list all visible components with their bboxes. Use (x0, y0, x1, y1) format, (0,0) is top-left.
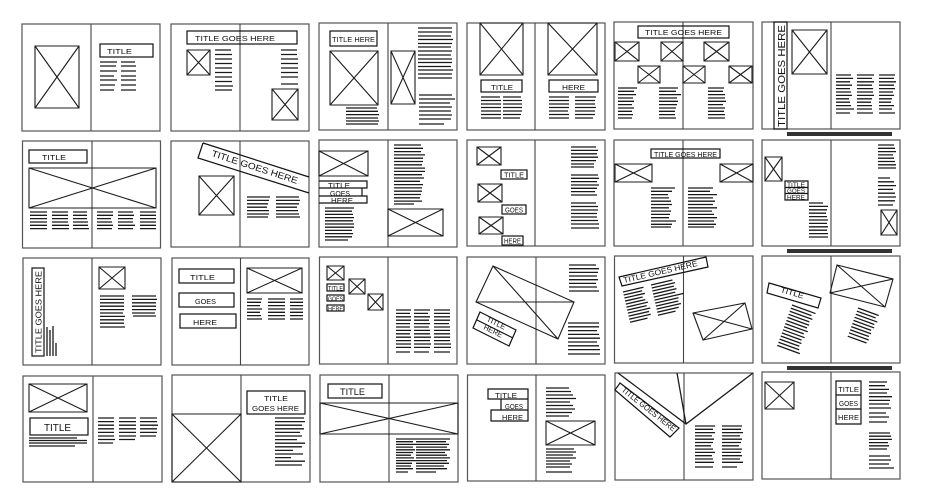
spread 20 (172, 375, 310, 482)
spread 14 (172, 258, 309, 365)
bar 3 (787, 366, 892, 370)
image placeholder (199, 176, 234, 215)
title: TITLE GOES HERE (645, 28, 722, 37)
title: TITLE (264, 394, 288, 403)
spread 16 (467, 257, 605, 364)
image placeholder (546, 421, 595, 445)
stacked title: TITLE (495, 391, 517, 400)
text column left (325, 208, 354, 240)
rotated title: TITLE GOES HERE (620, 385, 677, 433)
bar 1 (787, 132, 892, 136)
image placeholder (35, 46, 79, 108)
text block (546, 388, 576, 416)
stacked title: GOES (330, 191, 350, 198)
image placeholder (247, 268, 302, 293)
fold lines image placeholder (618, 373, 753, 424)
stacked title: TITLE (838, 385, 859, 394)
spread 18 (762, 256, 900, 363)
small title labels: HERE (328, 306, 344, 313)
title: TITLE (190, 273, 215, 282)
text columns (396, 439, 450, 472)
spread 17 (614, 256, 753, 363)
rotated title: HERE (482, 323, 504, 340)
text block bottom (568, 323, 600, 354)
vertical text lines (47, 326, 56, 356)
text blocks (571, 147, 599, 228)
text block top (569, 265, 599, 291)
spread 21 (320, 375, 458, 482)
text column centre (809, 203, 828, 237)
image placeholder right (548, 23, 597, 75)
rotated text column (848, 308, 880, 344)
image placeholders (327, 266, 383, 310)
title right: HERE (562, 83, 585, 92)
spread 5 (614, 22, 753, 129)
bar 2 (787, 249, 892, 253)
text column right (281, 50, 298, 84)
image placeholder (29, 384, 87, 412)
spread 10 (467, 140, 605, 246)
image placeholder (765, 382, 794, 409)
text block top (418, 28, 453, 78)
text columns (396, 310, 451, 352)
rotated title (473, 312, 516, 346)
image placeholders (615, 164, 753, 182)
stacked title: GOES (787, 188, 806, 195)
stacked title: HERE (787, 194, 806, 202)
text blocks right (878, 145, 896, 205)
text columns (100, 296, 157, 327)
text columns (247, 197, 300, 217)
intro text (29, 438, 87, 446)
vertical title: TITLE GOES HERE (34, 271, 44, 353)
stacked title: GOES (839, 399, 858, 408)
goes label: GOES (505, 206, 523, 214)
large image placeholder (172, 414, 241, 482)
spread 13 (23, 258, 161, 365)
image placeholder (881, 210, 897, 235)
goes label: GOES (195, 297, 216, 306)
text column left (215, 50, 233, 90)
text columns (618, 88, 726, 118)
spread 12 (762, 140, 900, 246)
title label: TITLE (504, 170, 524, 180)
title: TITLE GOES HERE (195, 34, 275, 43)
small title labels (327, 284, 344, 313)
image placeholder (272, 89, 298, 120)
image placeholder (99, 267, 125, 289)
title: TITLE (107, 47, 132, 56)
title: TITLE (42, 153, 66, 162)
stacked title: GOES (505, 402, 523, 411)
rotated text column (623, 287, 652, 322)
text columns (695, 426, 743, 467)
title: TITLE (340, 387, 365, 397)
spread 3 (319, 23, 457, 130)
spread 7 (22, 141, 160, 248)
slanted title: TITLE GOES HERE (210, 148, 299, 186)
stacked title: HERE (838, 413, 859, 422)
spread 11 (614, 140, 753, 246)
rotated title: TITLE GOES HERE (622, 259, 699, 285)
rotated title: TITLE (779, 285, 805, 301)
image placeholder (765, 157, 782, 181)
rotated image placeholder (693, 303, 752, 340)
text column (275, 418, 305, 465)
here label: HERE (193, 318, 217, 327)
text columns (836, 75, 896, 113)
spread 22 (468, 375, 605, 481)
stacked title (836, 381, 861, 424)
vertical title: TITLE GOES HERE (777, 25, 788, 127)
title: TITLE HERE (332, 35, 375, 44)
text columns (98, 418, 158, 443)
image placeholder (187, 50, 210, 75)
small title labels: GOES (328, 296, 344, 303)
spread 8 (171, 141, 309, 247)
stacked title (785, 181, 808, 202)
text columns (30, 212, 156, 229)
spread 9 (319, 140, 457, 247)
rotated text column (651, 278, 687, 315)
image placeholders (615, 42, 752, 83)
title: GOES HERE (252, 404, 299, 413)
text column right (394, 145, 425, 204)
spread 19 (23, 376, 162, 482)
image placeholder left (480, 23, 523, 75)
text columns (247, 299, 303, 319)
caption text (346, 108, 379, 124)
rotated image placeholder (476, 266, 574, 339)
rotated image placeholder (830, 265, 893, 307)
small title labels: TITLE (328, 286, 344, 292)
title: TITLE (44, 423, 71, 434)
text columns (481, 97, 596, 118)
spread 24 (762, 372, 900, 479)
text columns (651, 188, 717, 227)
spread 6 (762, 22, 900, 129)
text columns (100, 62, 136, 90)
stacked title: TITLE (787, 182, 806, 189)
text block bottom (419, 95, 455, 124)
rotated title: TITLE (485, 315, 507, 332)
text blocks (869, 382, 894, 468)
title: TITLE GOES HERE (654, 150, 717, 159)
here label: HERE (504, 236, 521, 246)
stacked title: HERE (331, 198, 353, 205)
spread 23 (615, 373, 753, 480)
image placeholder (391, 51, 415, 104)
spread 15 (320, 257, 457, 364)
stacked title (488, 389, 528, 422)
spread 2 (171, 24, 309, 131)
image placeholder top (319, 151, 368, 176)
image placeholder (330, 51, 378, 105)
spread 1 (22, 24, 160, 131)
wide image placeholder (320, 403, 458, 434)
title (247, 391, 305, 414)
title left: TITLE (491, 83, 513, 92)
stacked title (319, 181, 367, 205)
spread 4 (467, 23, 605, 130)
image placeholder (792, 30, 827, 74)
image placeholder bottom (388, 209, 443, 236)
wide image placeholder (29, 168, 156, 208)
stacked title: HERE (502, 413, 523, 422)
text block (546, 449, 576, 472)
rotated text column (777, 305, 815, 354)
stacked title: TITLE (328, 183, 350, 190)
image placeholders (477, 147, 503, 234)
